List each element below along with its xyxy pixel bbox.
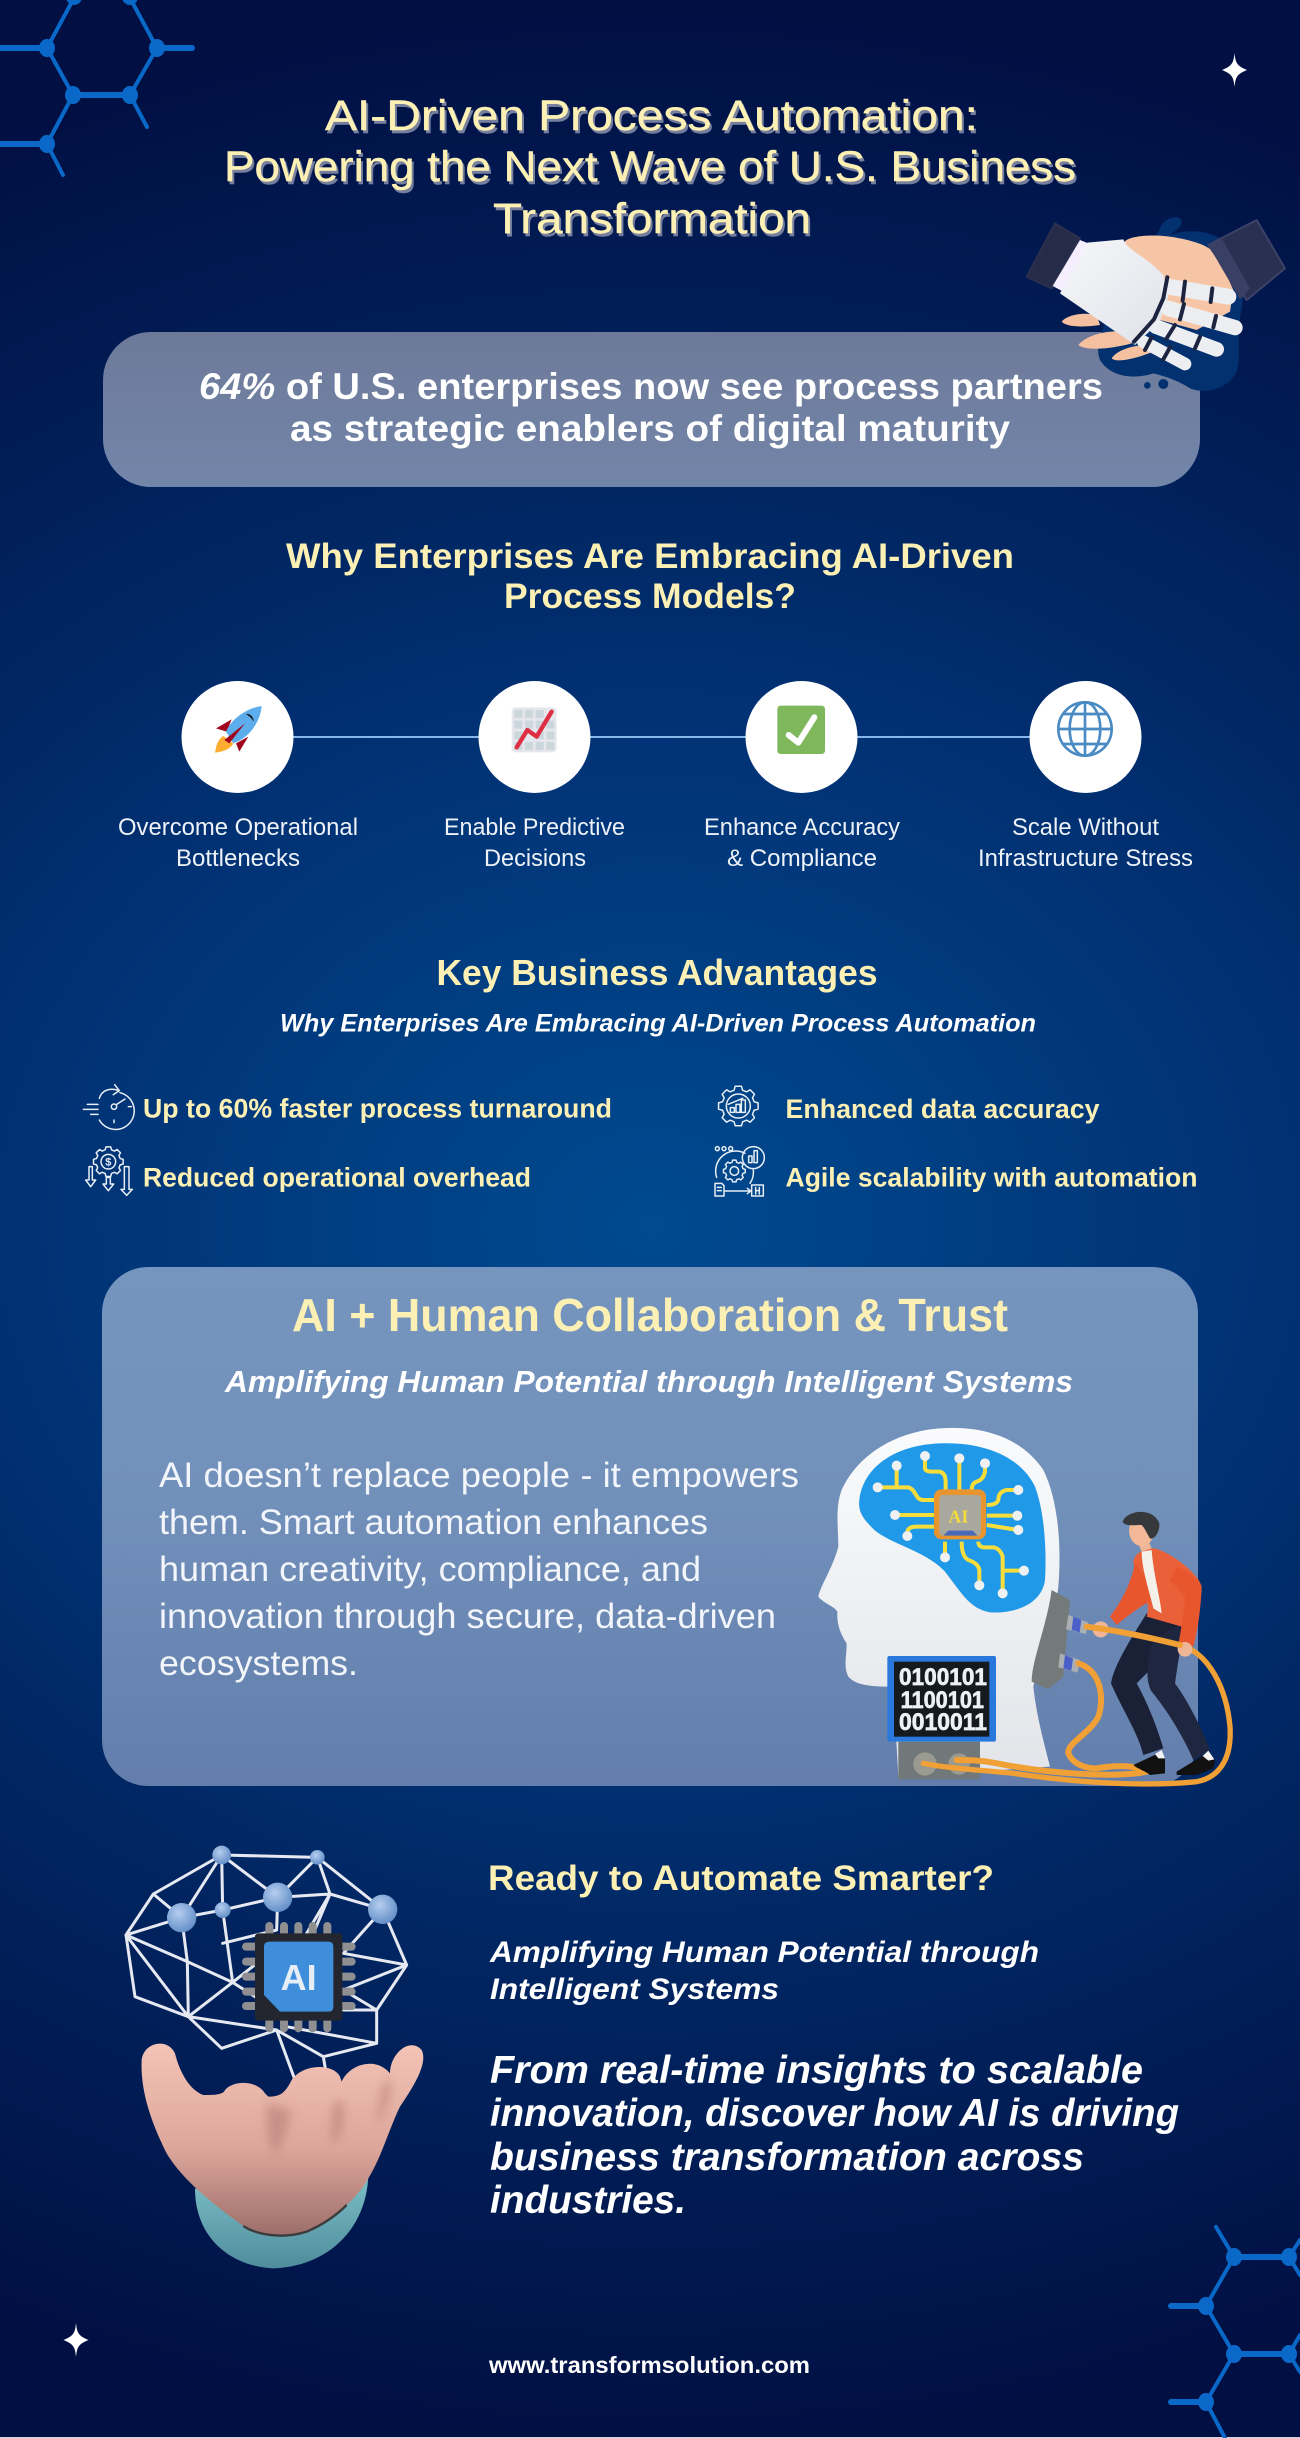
step: enable predictive decisions: Enable Predictive xyxy=(444,814,625,841)
brain circuit xyxy=(859,1443,1046,1613)
panel body text: human creativity, compliance, and xyxy=(159,1550,701,1589)
binary screen: 1100101 xyxy=(901,1687,984,1714)
decoration: hexagon network top-left xyxy=(0,0,192,175)
binary screen: 0100101 xyxy=(899,1664,987,1691)
section heading: why enterprises: Process Models? xyxy=(504,577,796,616)
icon: gear with chart xyxy=(719,1086,758,1126)
connector line xyxy=(237,736,1085,738)
advantage: data accuracy: Enhanced data accuracy xyxy=(786,1094,1100,1124)
section heading: why enterprises: Why Enterprises Are Embracing AI-Driven xyxy=(286,537,1014,576)
icon: globe xyxy=(1058,702,1112,756)
binary screen xyxy=(887,1656,996,1779)
AI chip: AI xyxy=(281,1957,317,1998)
binary screen: 0010011 xyxy=(899,1709,987,1736)
icon: rocket xyxy=(215,706,262,753)
step: enable predictive decisions: Decisions xyxy=(484,845,586,872)
orange cables xyxy=(923,1645,1230,1784)
step: enhance accuracy and compliance xyxy=(704,681,900,872)
closing statement: innovation, discover how AI is driving xyxy=(490,2092,1179,2135)
step: enhance accuracy and compliance: Enhance Accuracy xyxy=(704,814,900,841)
panel: headline statistic xyxy=(103,332,1200,487)
panel subheading: Amplifying Human Potential through Intelligent Systems xyxy=(224,1364,1073,1399)
decoration: hexagon network bottom-right xyxy=(1171,2227,1300,2438)
icon: automation gear cycle xyxy=(715,1147,764,1196)
step: overcome operational bottlenecks: Overcome Operational xyxy=(118,814,358,841)
panel body text: innovation through secure, data-driven xyxy=(159,1597,776,1636)
hand xyxy=(142,2044,423,2268)
step: enable predictive decisions xyxy=(444,681,625,872)
closing statement: industries. xyxy=(490,2179,686,2222)
panel: AI + human collaboration xyxy=(102,1267,1198,1786)
icon: trend chart xyxy=(512,707,557,752)
subheading: amplifying human potential: Amplifying Human Potential through xyxy=(489,1936,1039,1969)
illustration: human and robot handshake xyxy=(1027,217,1285,391)
illustration: AI network brain above hand xyxy=(126,1846,423,2268)
closing statement: business transformation across xyxy=(490,2136,1084,2179)
step: scale without infrastructure stress: Scale Without xyxy=(1012,814,1159,841)
advantage: reduced overhead: Reduced operational overhead xyxy=(143,1162,531,1192)
panel body text: AI doesn’t replace people - it empowers xyxy=(159,1456,799,1495)
heading: key business advantages: Key Business Advantages xyxy=(436,952,878,993)
man xyxy=(1087,1512,1215,1775)
subheading: amplifying human potential: Intelligent Systems xyxy=(490,1973,779,2006)
head xyxy=(818,1428,1060,1777)
subheading: advantages: Why Enterprises Are Embracing AI-Driven Process Automation xyxy=(280,1010,1036,1038)
AI chip xyxy=(246,1926,352,2028)
step: scale without infrastructure stress xyxy=(978,681,1193,872)
illustration: AI head with man pulling cable xyxy=(818,1428,1230,1784)
advantage: faster turnaround: Up to 60% faster process turnaround xyxy=(143,1094,612,1124)
closing statement: From real-time insights to scalable xyxy=(490,2049,1143,2092)
advantage: faster turnaround xyxy=(83,1085,612,1129)
step: overcome operational bottlenecks: Bottlenecks xyxy=(176,845,300,872)
subheading: amplifying human potential xyxy=(489,1936,1039,2006)
icon: sparkle bottom-left xyxy=(64,2323,88,2357)
step: overcome operational bottlenecks xyxy=(118,681,358,872)
advantage: data accuracy xyxy=(719,1086,1100,1126)
advantage: agile scalability xyxy=(715,1147,1198,1196)
icon: stopwatch xyxy=(83,1085,134,1129)
brain circuit: AI xyxy=(948,1507,968,1527)
title: Transformation xyxy=(493,195,811,243)
advantage: agile scalability: Agile scalability with automation xyxy=(786,1162,1198,1192)
title: Powering the Next Wave of U.S. Business xyxy=(224,143,1076,191)
title xyxy=(224,92,1076,243)
statistic text: 64% of U.S. enterprises now see process partners xyxy=(199,366,1103,407)
icon: sparkle top-right xyxy=(1222,53,1247,87)
statistic text xyxy=(199,366,1103,449)
advantage: reduced overhead xyxy=(86,1147,531,1195)
title: AI-Driven Process Automation: xyxy=(325,92,978,140)
closing statement xyxy=(490,2049,1179,2222)
icon: gear with dollar and down arrows xyxy=(86,1147,132,1195)
panel body text: ecosystems. xyxy=(159,1644,358,1683)
panel heading: AI + Human Collaboration & Trust xyxy=(292,1289,1008,1341)
cable plug xyxy=(1032,1590,1088,1689)
dollar sign: $ xyxy=(105,1156,111,1168)
step: enhance accuracy and compliance: & Compliance xyxy=(727,845,877,872)
panel body text: them. Smart automation enhances xyxy=(159,1503,708,1542)
statistic text: as strategic enablers of digital maturity xyxy=(290,408,1010,449)
icon: check mark xyxy=(777,706,825,754)
panel body text xyxy=(159,1456,799,1683)
heading: ready to automate: Ready to Automate Smarter? xyxy=(488,1859,994,1898)
website url: www.transformsolution.com xyxy=(488,2352,810,2378)
wire network brain xyxy=(126,1855,407,2080)
step: scale without infrastructure stress: Infrastructure Stress xyxy=(978,845,1193,872)
section heading: why enterprises xyxy=(286,537,1014,616)
